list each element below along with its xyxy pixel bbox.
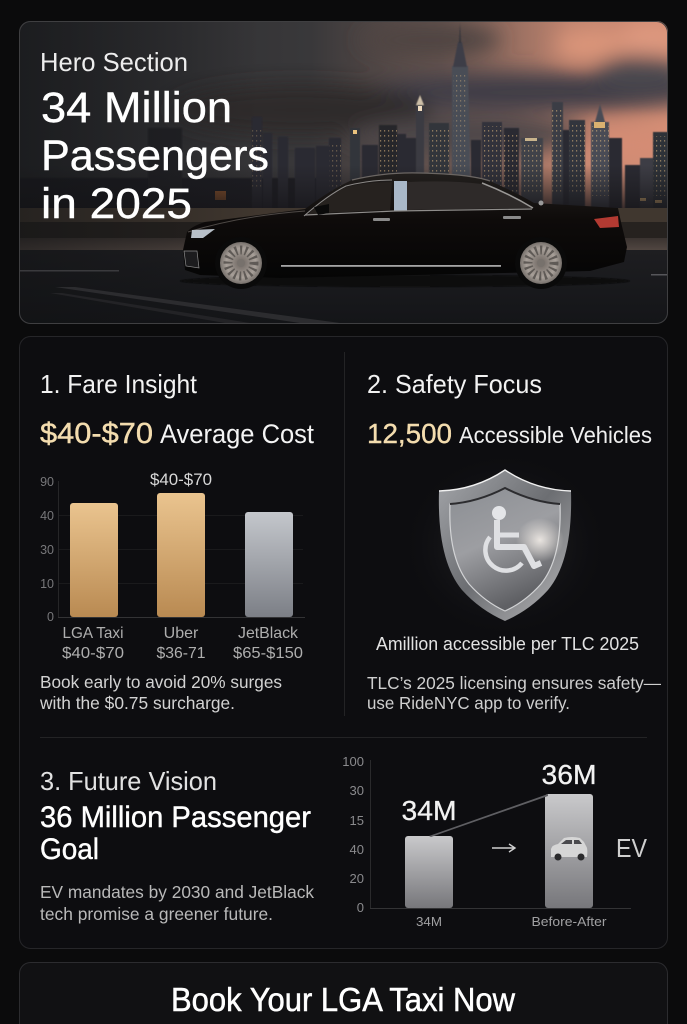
bar: 36M bbox=[545, 794, 593, 908]
shield caption: Amillion accessible per TLC 2025 bbox=[376, 633, 639, 654]
fare statistic bbox=[40, 418, 314, 450]
hero headline: Passengers bbox=[41, 132, 269, 180]
fare note bbox=[39, 672, 282, 713]
bar chart: fare comparison: 90 bbox=[40, 475, 54, 489]
EV label: EV bbox=[616, 833, 648, 863]
safety note: use RideNYC app to verify. bbox=[367, 693, 570, 713]
safety statistic: 12,500 bbox=[367, 418, 452, 449]
icon: electric car bbox=[551, 837, 587, 860]
fare heading: 1. Fare Insight bbox=[40, 369, 198, 399]
before-after bar chart: 100 bbox=[342, 754, 364, 769]
bar chart: fare comparison: 0 bbox=[47, 610, 54, 624]
hero eyebrow: Hero Section bbox=[40, 47, 188, 77]
before-after bar chart: 20 bbox=[350, 871, 364, 886]
skyline window lights bbox=[252, 75, 668, 196]
safety heading: 2. Safety Focus bbox=[367, 369, 542, 399]
category labels: $65-$150 bbox=[233, 645, 303, 662]
before-after bar chart: 30 bbox=[350, 783, 364, 798]
safety statistic: Accessible Vehicles bbox=[459, 422, 652, 448]
bar value labels: 34M bbox=[402, 795, 456, 826]
category labels bbox=[62, 625, 303, 662]
category labels: $40-$70 bbox=[62, 645, 124, 662]
future heading: 3. Future Vision bbox=[40, 766, 217, 796]
future goal statement bbox=[40, 801, 311, 866]
section: fare insight bbox=[39, 369, 314, 713]
skyline bbox=[100, 26, 667, 208]
bar chart: fare comparison bbox=[40, 471, 305, 662]
axis labels: 34M bbox=[416, 914, 442, 929]
fare statistic: $40-$70 bbox=[40, 418, 153, 450]
section: future vision bbox=[40, 754, 648, 929]
bar value labels bbox=[402, 759, 596, 826]
trend line bbox=[429, 794, 548, 837]
bar: LGA Taxi bbox=[70, 503, 118, 617]
fare note: Book early to avoid 20% surges bbox=[40, 672, 282, 692]
bar chart: fare comparison: 40 bbox=[40, 509, 54, 523]
category labels: Uber bbox=[164, 625, 199, 642]
bar chart: fare comparison: 10 bbox=[40, 577, 54, 591]
bar value label: $40-$70 bbox=[150, 471, 212, 489]
before-after bar chart: 0 bbox=[357, 900, 364, 915]
category labels: LGA Taxi bbox=[62, 625, 124, 642]
axis labels bbox=[416, 914, 607, 929]
car bbox=[180, 173, 630, 289]
future goal statement: 36 Million Passenger bbox=[40, 801, 311, 834]
rear wheel bbox=[517, 242, 566, 289]
category labels: $36-71 bbox=[156, 645, 206, 662]
panel: hero section bbox=[19, 21, 687, 324]
safety statistic bbox=[367, 418, 652, 449]
axis labels: Before-After bbox=[532, 914, 607, 929]
hero headline: 34 Million bbox=[41, 84, 232, 132]
safety note: TLC’s 2025 licensing ensures safety— bbox=[367, 673, 661, 693]
icon: shield with wheelchair bbox=[400, 450, 610, 640]
bar: 34M bbox=[405, 836, 453, 908]
hero headline bbox=[41, 84, 269, 228]
call to action text: Book Your LGA Taxi Now bbox=[171, 981, 515, 1018]
bar: Uber bbox=[157, 493, 205, 617]
future note bbox=[40, 882, 314, 924]
future goal statement: Goal bbox=[40, 833, 99, 866]
bar value labels: 36M bbox=[542, 759, 596, 790]
hero headline: in 2025 bbox=[41, 180, 192, 228]
road markings bbox=[19, 270, 668, 323]
fare statistic: Average Cost bbox=[160, 419, 314, 449]
panel: call to action bbox=[20, 962, 668, 1024]
bar chart: fare comparison: 30 bbox=[40, 543, 54, 557]
before-after bar chart: 15 bbox=[350, 813, 364, 828]
front wheel bbox=[218, 242, 262, 289]
future note: tech promise a greener future. bbox=[40, 904, 273, 924]
arrow bbox=[492, 844, 515, 852]
section: safety focus bbox=[367, 369, 661, 713]
safety note bbox=[367, 673, 661, 713]
panel: insights bbox=[20, 336, 668, 948]
before-after bar chart bbox=[342, 754, 648, 929]
fare note: with the $0.75 surcharge. bbox=[39, 693, 235, 713]
category labels: JetBlack bbox=[238, 625, 299, 642]
future note: EV mandates by 2030 and JetBlack bbox=[40, 882, 314, 902]
before-after bar chart: 40 bbox=[350, 842, 364, 857]
bar: JetBlack bbox=[245, 512, 293, 617]
